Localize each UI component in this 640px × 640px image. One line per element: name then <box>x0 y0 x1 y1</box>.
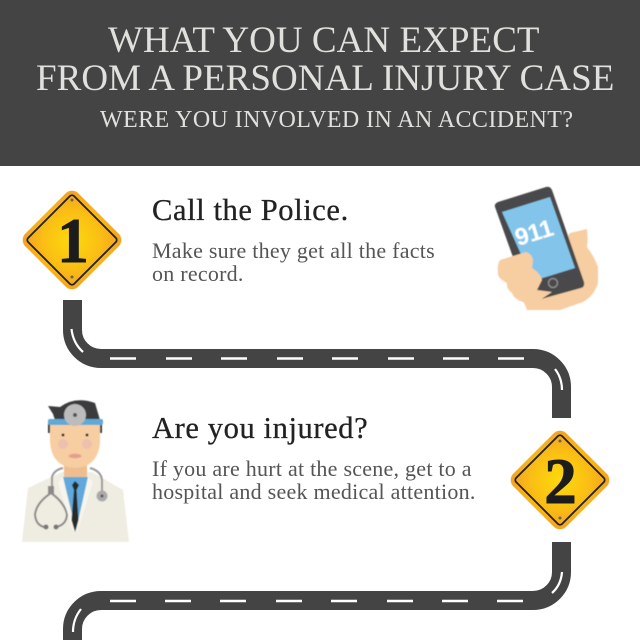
step 1 body: on record. <box>152 261 244 286</box>
title line 2: FROM A PERSONAL INJURY CASE <box>36 58 614 99</box>
subtitle: WERE YOU INVOLVED IN AN ACCIDENT? <box>100 107 573 133</box>
sign 2 <box>507 427 613 533</box>
icon: doctor <box>22 400 129 542</box>
sign 1 <box>19 187 125 293</box>
step 1 body <box>152 238 435 286</box>
step 2 heading: Are you injured? <box>152 410 368 444</box>
sign 1: 1 <box>57 206 89 276</box>
icon: hand holding phone: 911 <box>512 215 557 252</box>
title line 1: WHAT YOU CAN EXPECT <box>108 20 540 61</box>
header banner <box>0 0 640 166</box>
step 1 body: Make sure they get all the facts <box>152 238 435 263</box>
road segment 1 <box>72 300 562 418</box>
step 2 body: hospital and seek medical attention. <box>152 479 476 504</box>
step 2 body <box>152 456 476 504</box>
step 2 body: If you are hurt at the scene, get to a <box>152 456 472 481</box>
icon: hand holding phone <box>495 187 598 310</box>
step 1 heading: Call the Police. <box>152 192 349 226</box>
sign 2: 2 <box>544 446 577 518</box>
road segment 2 <box>72 542 562 640</box>
